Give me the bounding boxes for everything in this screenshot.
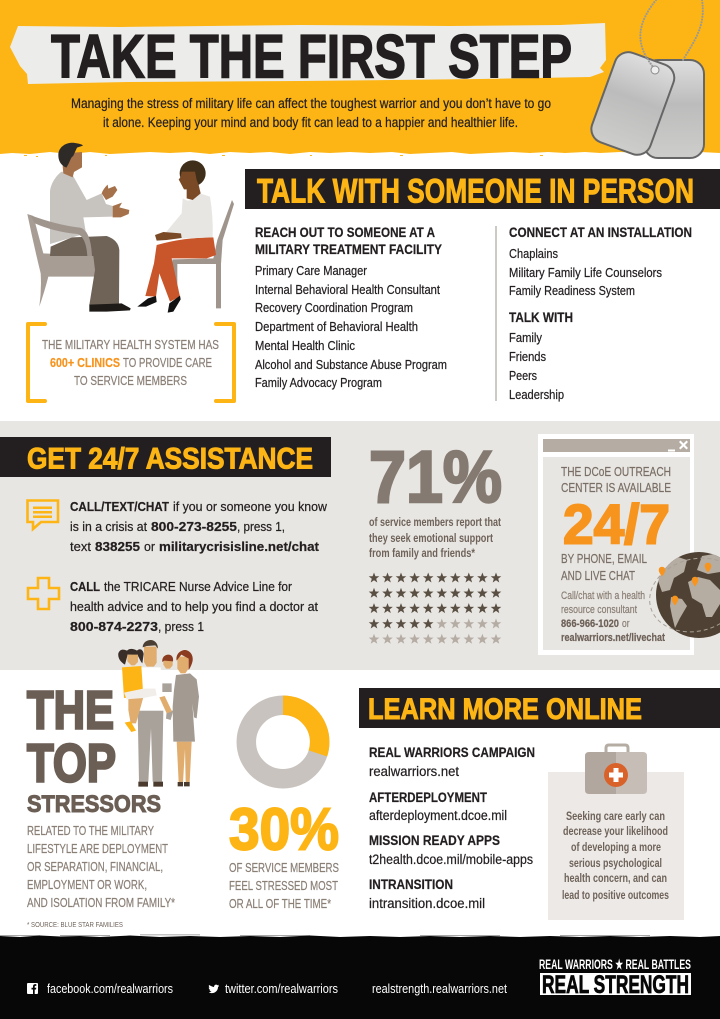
mother shoes: [178, 782, 190, 786]
panel: outreach center window: [538, 434, 720, 655]
call text chat block: if you or someone you know: [173, 499, 328, 514]
list: online resources: [369, 745, 535, 911]
woman's face and neck: [179, 172, 201, 200]
outreach text: 866-966-1020: [561, 618, 619, 630]
stressors text: [27, 824, 175, 910]
outreach text: [561, 465, 671, 644]
outreach text: or: [622, 618, 630, 630]
statistic: 71 percent: they seek emotional support: [369, 533, 493, 545]
icon: globe: [649, 552, 720, 638]
stressors text: RELATED TO THE MILITARY: [27, 824, 155, 838]
statistic: 71 percent: 71%: [369, 437, 502, 518]
call text chat block: is in a crisis at: [70, 519, 147, 534]
list: connect at an installation: Family Readiness System: [509, 284, 635, 298]
boy shorts and shoe: [162, 683, 173, 720]
heading: the top stressors: THE: [27, 680, 114, 740]
boy head: [163, 660, 173, 669]
seeking care text: health concern, and can: [564, 873, 667, 885]
father shoes: [138, 782, 163, 787]
footer link: real strength: realstrength.realwarriors.net: [372, 982, 507, 996]
stressors text: OR SEPARATION, FINANCIAL,: [27, 860, 163, 874]
list: connect at an installation: Military Family Life Counselors: [509, 266, 662, 280]
outreach text: 24/7: [563, 492, 670, 556]
statistic: 71 percent: [369, 437, 502, 560]
list: talk with: Leadership: [509, 388, 564, 402]
icon: twitter: [209, 985, 219, 993]
statistic: 30 percent: FEEL STRESSED MOST: [229, 879, 338, 893]
statistic: 71 percent: from family and friends*: [369, 548, 475, 560]
bracket right: [216, 324, 234, 401]
callout text: 600+ CLINICS: [50, 356, 120, 370]
statistic: 30 percent: OR ALL OF THE TIME*: [229, 897, 331, 911]
woman's shoes: [137, 296, 181, 313]
call text chat block: 800-273-8255: [151, 519, 237, 534]
tricare block: 800-874-2273: [70, 619, 158, 634]
callout text: TO PROVIDE CARE: [123, 356, 212, 370]
list: military treatment facility: REACH OUT TO SOMEONE AT A: [255, 225, 435, 240]
list: online resources: realwarriors.net: [369, 764, 459, 779]
panel: assistance background: [0, 421, 720, 670]
footer link: twitter: twitter.com/realwarriors: [225, 982, 338, 996]
illustration: two people talking: [27, 143, 234, 313]
statistic: 30 percent: OF SERVICE MEMBERS: [229, 861, 339, 875]
panel: black footer: [0, 934, 720, 1019]
call text chat block: 838255: [95, 539, 140, 554]
panel: seeking care: [548, 745, 684, 920]
man's hands: [102, 185, 129, 217]
source note: * SOURCE: BLUE STAR FAMILIES: [27, 920, 123, 929]
seeking care text: of developing a more: [571, 842, 661, 854]
seeking care text: Seeking care early can: [566, 811, 665, 823]
statistic: 30 percent: 30%: [229, 796, 339, 862]
seeking care text: decrease your likelihood: [563, 826, 668, 838]
icon: dog tags: [587, 0, 704, 159]
girl shoes: [125, 721, 136, 732]
map pins: [659, 563, 711, 606]
man's chair seat and legs: [27, 214, 97, 307]
list: online resources: MISSION READY APPS: [369, 833, 500, 848]
list: military treatment facility: Recovery Coordination Program: [255, 301, 413, 315]
woman's chair: [172, 200, 234, 308]
call text chat block: , press 1,: [237, 519, 285, 534]
list: military treatment facility: Primary Care Manager: [255, 264, 367, 278]
title: TAKE THE FIRST STEP: [51, 22, 572, 90]
girl dress: [122, 666, 143, 698]
father legs: [138, 711, 163, 782]
icon: medical briefcase: [585, 745, 647, 794]
mother suit: [173, 673, 199, 742]
call text chat block: militarycrisisline.net/chat: [159, 539, 320, 554]
donut chart: 30 percent: [246, 705, 320, 779]
callout text: TO SERVICE MEMBERS: [74, 374, 187, 388]
header intro text: it alone. Keeping your mind and body fit can lead to a happier and healthier life.: [103, 115, 518, 130]
heading: the top stressors: [27, 680, 161, 818]
woman's shirt: [166, 193, 213, 239]
list: military treatment facility: Mental Health Clinic: [255, 339, 355, 353]
father hair: [143, 640, 158, 649]
boy hair: [162, 655, 173, 662]
woman's hair: [180, 160, 206, 186]
outreach text: THE DCoE OUTREACH: [561, 465, 671, 479]
outreach text: BY PHONE, EMAIL: [561, 551, 647, 566]
icon: facebook: [27, 983, 38, 994]
list: online resources: AFTERDEPLOYMENT: [369, 790, 488, 805]
tricare block: the TRICARE Nurse Advice Line for: [104, 579, 293, 594]
list: military treatment facility: Family Advocacy Program: [255, 376, 382, 390]
seeking care text: [562, 811, 669, 902]
girl hair: [118, 649, 144, 665]
list: talk with: [509, 310, 573, 402]
heading: the top stressors: TOP: [27, 734, 116, 794]
mother legs: [177, 742, 192, 782]
mother head: [177, 657, 189, 673]
girl arm and father's arm: [124, 689, 157, 699]
mother hair: [176, 650, 193, 670]
header intro text: [71, 96, 551, 130]
logo: real strength: [539, 957, 691, 999]
title banner: [10, 22, 606, 90]
bracket left: [28, 324, 45, 401]
list: online resources: INTRANSITION: [369, 877, 453, 892]
call text chat block: text: [70, 539, 91, 554]
panel: clinics callout: [28, 324, 234, 401]
list: connect at an installation: CONNECT AT AN INSTALLATION: [509, 225, 692, 240]
star rating chart: [369, 572, 501, 644]
father shirt: [139, 667, 163, 711]
girl legs: [128, 695, 144, 723]
man's head: [63, 152, 82, 177]
tricare block: health advice and to help you find a doctor at: [70, 599, 318, 614]
tricare block: , press 1: [158, 619, 204, 634]
father head: [144, 647, 157, 667]
header intro text: Managing the stress of military life can affect the toughest warrior and you don’t have to go: [71, 96, 551, 111]
woman's hands: [155, 232, 182, 241]
outreach text: CENTER IS AVAILABLE: [561, 481, 671, 495]
tricare block: CALL: [70, 579, 100, 594]
boy shirt: [159, 671, 176, 683]
tricare block: [70, 579, 318, 634]
woman's trousers: [145, 237, 216, 302]
icon: medical cross: [28, 578, 59, 609]
list: online resources: REAL WARRIORS CAMPAIGN: [369, 745, 535, 760]
stressors text: EMPLOYMENT OR WORK,: [27, 878, 147, 892]
man's hair: [58, 143, 83, 168]
footer link: facebook: facebook.com/realwarriors: [47, 982, 173, 996]
boy leg: [159, 696, 172, 713]
list: military treatment facility: Alcohol and Substance Abuse Program: [255, 358, 447, 372]
list: military treatment facility: Internal Behavioral Health Consultant: [255, 283, 440, 297]
window buttons: [668, 440, 688, 452]
call text chat block: or: [144, 539, 156, 554]
man's chair armrest: [30, 215, 92, 256]
panel: yellow header: [0, 0, 720, 157]
seeking care text: serious psychological: [569, 858, 662, 870]
list: talk with: Peers: [509, 369, 537, 383]
man's torso: [50, 172, 113, 244]
callout text: [42, 338, 219, 388]
list: online resources: intransition.dcoe.mil: [369, 896, 485, 911]
list: military treatment facility: MILITARY TREATMENT FACILITY: [255, 242, 442, 257]
list: talk with: TALK WITH: [509, 310, 573, 325]
icon: chat bubble: [28, 500, 58, 529]
illustration: military family: [118, 640, 199, 787]
girl head: [127, 655, 138, 665]
call text chat block: CALL/TEXT/CHAT: [70, 499, 169, 514]
list: online resources: t2health.dcoe.mil/mobile-apps: [369, 852, 533, 867]
outreach text: AND LIVE CHAT: [561, 568, 635, 583]
list: talk with: Family: [509, 331, 543, 345]
man's shoes: [89, 303, 131, 312]
outreach text: Call/chat with a health: [561, 590, 645, 602]
statistic: 30 percent: [229, 796, 339, 911]
outreach text: realwarriors.net/livechat: [561, 632, 665, 644]
list: military treatment facility: [255, 225, 447, 390]
seeking care text: lead to positive outcomes: [562, 890, 669, 902]
stressors text: LIFESTYLE ARE DEPLOYMENT: [27, 842, 168, 856]
list: connect at an installation: [509, 225, 692, 298]
list: military treatment facility: Department of Behavioral Health: [255, 320, 418, 334]
call text chat block: [70, 499, 328, 554]
statistic: 71 percent: of service members report that: [369, 517, 501, 529]
heading: get 24/7 assistance: GET 24/7 ASSISTANCE: [27, 442, 313, 476]
stressors text: AND ISOLATION FROM FAMILY*: [27, 896, 175, 910]
list: connect at an installation: Chaplains: [509, 247, 558, 261]
outreach text: resource consultant: [561, 604, 637, 616]
heading: learn more online: LEARN MORE ONLINE: [368, 693, 642, 726]
callout text: THE MILITARY HEALTH SYSTEM HAS: [42, 338, 219, 352]
heading: the top stressors: STRESSORS: [27, 791, 161, 818]
list: talk with: Friends: [509, 350, 546, 364]
man's trousers: [50, 236, 119, 305]
list: online resources: afterdeployment.dcoe.mil: [369, 808, 507, 823]
